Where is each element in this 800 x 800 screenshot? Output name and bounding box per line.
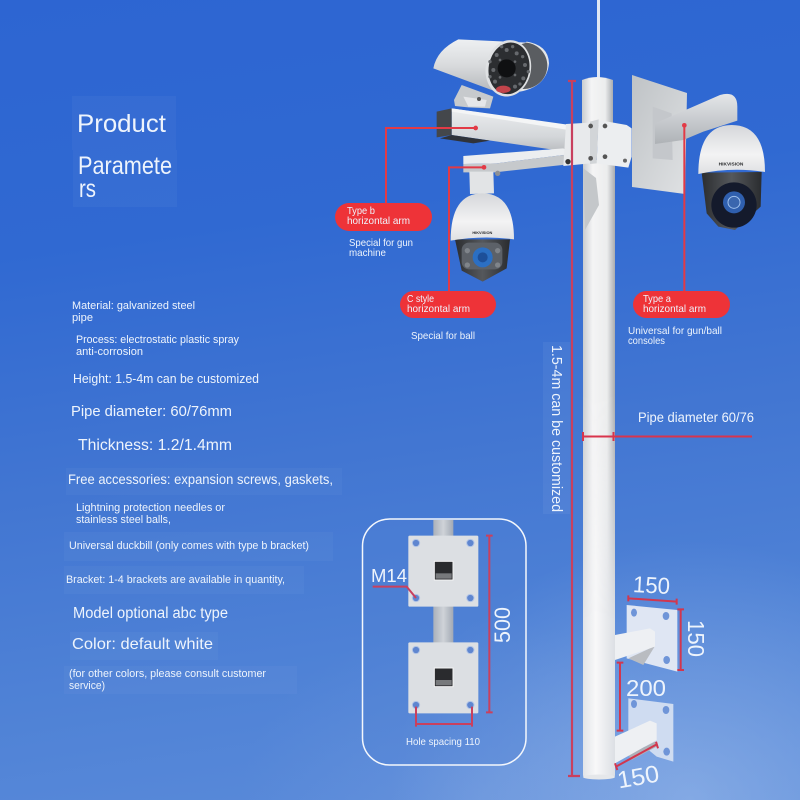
material bbox=[72, 300, 195, 324]
leader line: type a bbox=[682, 123, 687, 293]
leader line: type b bbox=[386, 126, 478, 203]
height dimension line bbox=[568, 80, 580, 776]
C style horizontal arm bbox=[463, 148, 572, 176]
leader line: C style bbox=[449, 165, 486, 293]
color: Color: default white bbox=[72, 636, 213, 653]
height label: 1.5-4m: 1.5-4m can be customized bbox=[548, 345, 564, 512]
free accessories: Free accessories: expansion screws, gaskets, bbox=[68, 472, 333, 487]
note: special for gun machine: Special for gun bbox=[349, 237, 413, 249]
dome camera a bbox=[698, 125, 765, 230]
pipe diameter: Pipe diameter: 60/76mm bbox=[71, 403, 232, 420]
label: type b arm bbox=[335, 203, 432, 231]
bracket label: 200: 200 bbox=[626, 675, 666, 701]
500 label: 500 bbox=[490, 607, 515, 643]
note: universal consoles: Universal for gun/ball bbox=[628, 325, 722, 337]
thickness: Thickness: 1.2/1.4mm bbox=[78, 437, 232, 454]
lower bracket bbox=[615, 698, 673, 763]
wall brackets bbox=[615, 595, 684, 770]
note: universal consoles bbox=[628, 325, 722, 347]
title panel bbox=[72, 96, 177, 207]
wall plate bbox=[632, 75, 687, 194]
main pole bbox=[582, 77, 615, 780]
label: type a arm: horizontal arm bbox=[643, 303, 706, 315]
panel: hole spacing bbox=[362, 519, 526, 765]
bracket label: top 150: 150 bbox=[632, 571, 671, 599]
lightning protection: stainless steel balls, bbox=[76, 514, 171, 526]
label: type a arm bbox=[633, 291, 730, 318]
dome camera a: HIKVISION bbox=[719, 162, 743, 167]
label: type b arm: horizontal arm bbox=[347, 215, 410, 227]
label: C style arm bbox=[400, 291, 496, 318]
label: C style arm: horizontal arm bbox=[407, 303, 470, 315]
hole spacing label: Hole spacing 110 bbox=[406, 736, 480, 748]
material: pipe bbox=[72, 312, 93, 324]
model: Model optional abc type bbox=[73, 605, 228, 622]
bracket label: bottom 150: 150 bbox=[615, 761, 661, 794]
lightning protection bbox=[76, 502, 225, 526]
process: anti-corrosion bbox=[76, 346, 143, 358]
bracket label: right 150: 150 bbox=[683, 620, 709, 657]
camera a arm bbox=[653, 94, 737, 160]
label: type a arm: Type a bbox=[643, 293, 671, 305]
M14 label: M14 bbox=[371, 566, 407, 586]
upper bracket bbox=[615, 605, 677, 672]
note: universal consoles: consoles bbox=[628, 335, 665, 347]
gun camera bbox=[433, 36, 549, 108]
hole spacing bracket bbox=[416, 707, 472, 727]
dome camera c bbox=[451, 172, 514, 282]
title: Parameters: rs bbox=[79, 175, 96, 203]
other colors note: service) bbox=[69, 680, 105, 692]
label: C style arm: C style bbox=[407, 293, 434, 305]
height: Height: 1.5-4m can be customized bbox=[73, 371, 259, 386]
note: special for ball: Special for ball bbox=[411, 330, 475, 342]
bracket: Bracket: 1-4 brackets are available in quantity, bbox=[66, 574, 285, 586]
parameter list bbox=[64, 300, 342, 694]
title: Parameters: Paramete bbox=[78, 152, 172, 180]
process: Process: electrostatic plastic spray bbox=[76, 334, 239, 346]
title: Product: Product bbox=[77, 110, 166, 138]
process bbox=[76, 334, 239, 358]
pipe diameter callout bbox=[583, 410, 754, 441]
mounting pipe bbox=[433, 520, 453, 643]
dome camera c: HIKVISION bbox=[472, 231, 493, 235]
lightning needle bbox=[597, 0, 600, 78]
note: special for gun machine: machine bbox=[349, 247, 386, 259]
upper mounting plate bbox=[408, 536, 478, 607]
type b horizontal arm bbox=[437, 108, 590, 155]
other colors note bbox=[69, 668, 266, 692]
lightning protection: Lightning protection needles or bbox=[76, 502, 225, 514]
M14 leader bbox=[373, 587, 416, 598]
pipe diameter callout: Pipe diameter 60/76 bbox=[638, 410, 754, 425]
title: Parameters bbox=[78, 152, 172, 203]
bracket dimension lines bbox=[615, 595, 684, 770]
lower mounting plate bbox=[408, 642, 478, 713]
label: type b arm: Type b bbox=[347, 205, 375, 217]
other colors note: (for other colors, please consult customer bbox=[69, 668, 266, 680]
note: special for gun machine bbox=[349, 237, 413, 259]
height label: 1.5-4m bbox=[543, 342, 570, 514]
material: Material: galvanized steel bbox=[72, 300, 195, 312]
universal duckbill: Universal duckbill (only comes with type b bracket) bbox=[69, 540, 309, 552]
pole clamp bbox=[563, 119, 632, 168]
dimension: 500 line bbox=[486, 536, 493, 712]
